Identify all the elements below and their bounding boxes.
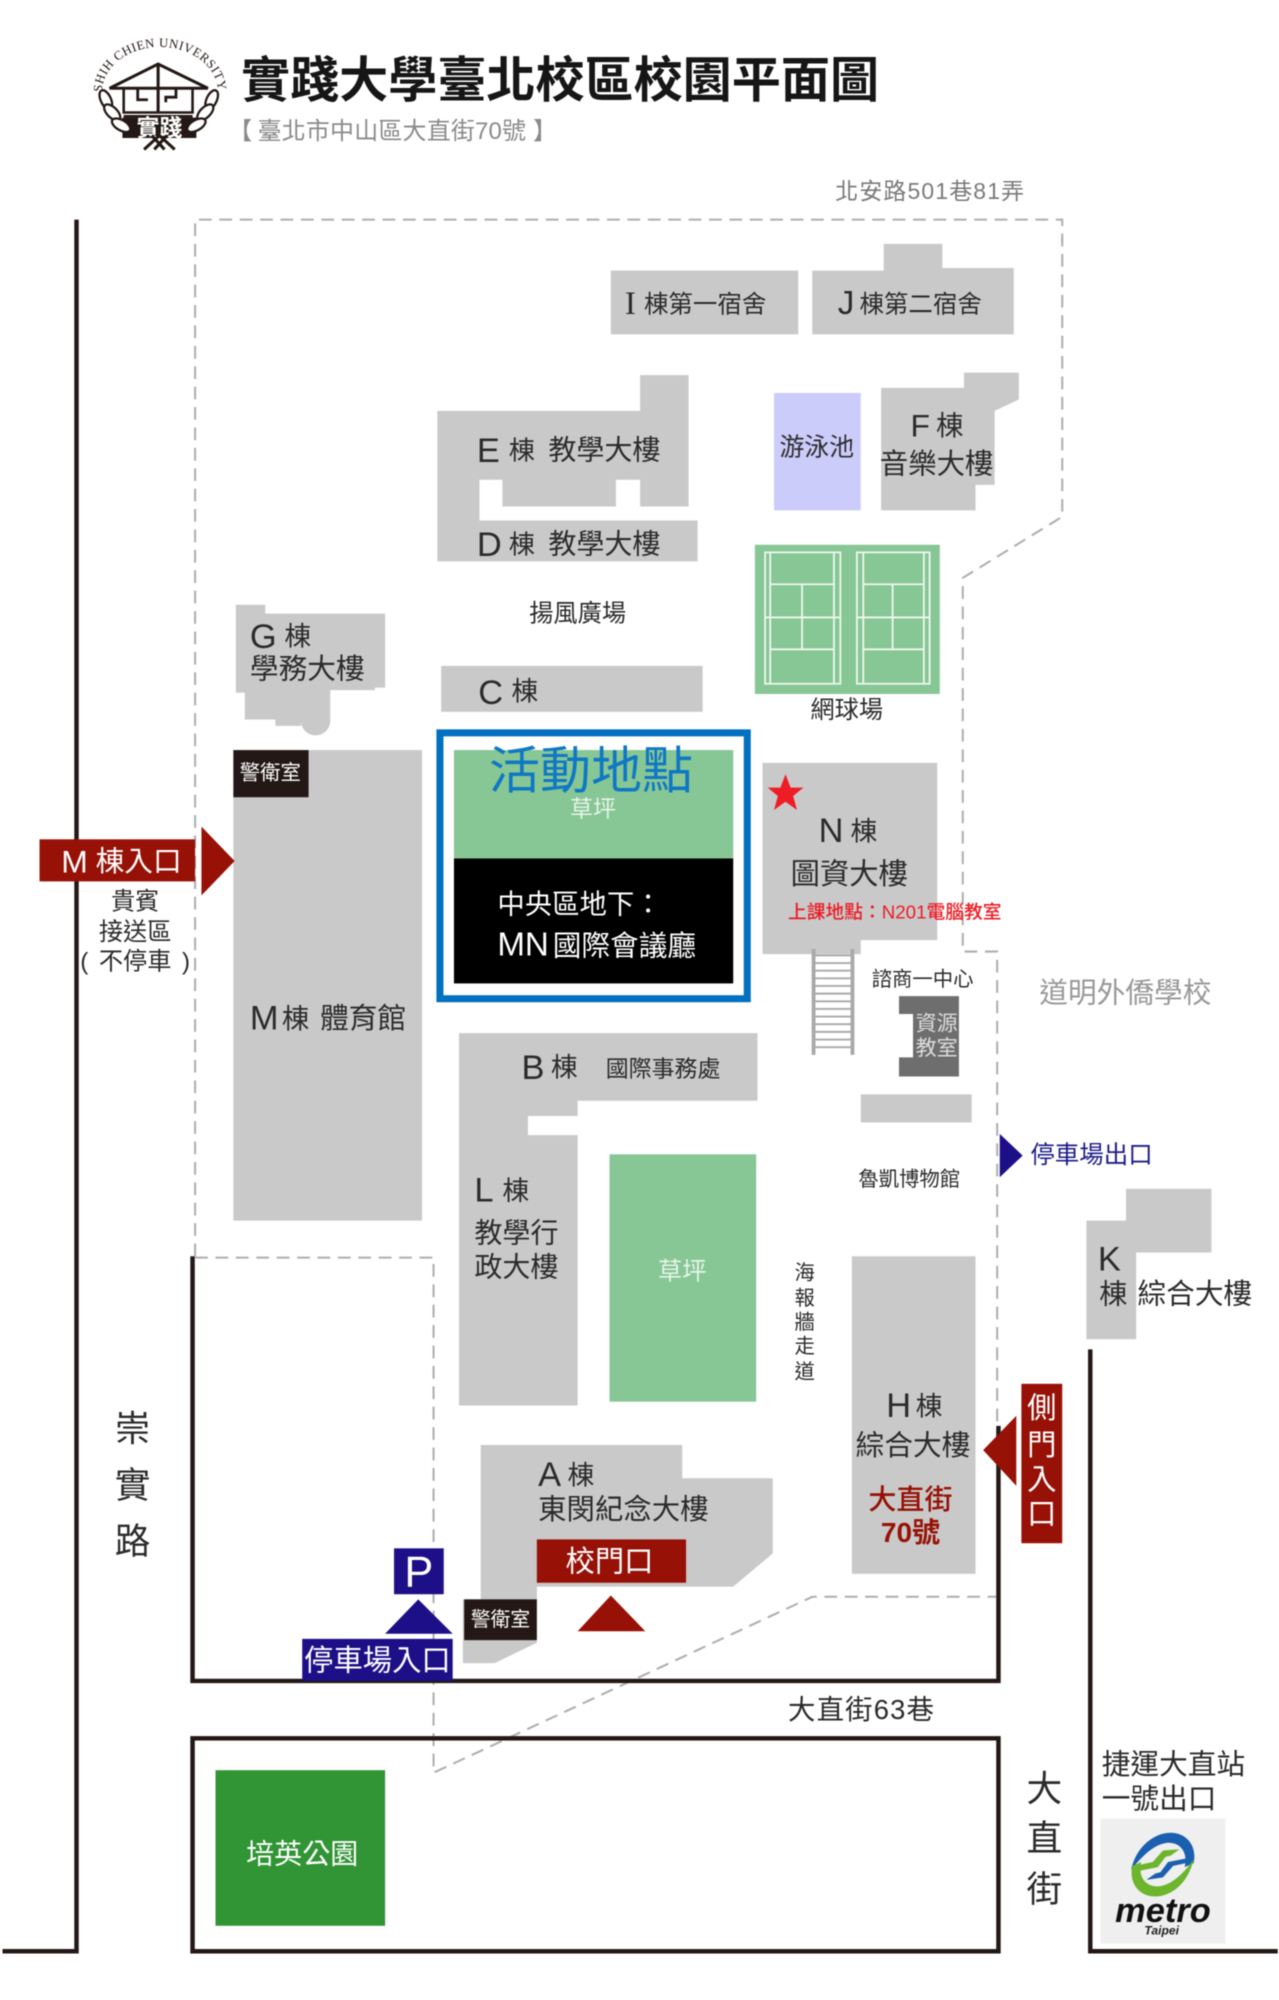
icon: Taipei metro logo: metro [1115, 1892, 1211, 1930]
building C: 棟 [511, 676, 538, 706]
building M gym [233, 750, 422, 1221]
resource classroom: 教室 [916, 1036, 958, 1060]
M entrance arrow: M [61, 843, 88, 879]
side gate entrance arrow: 入 [1027, 1464, 1056, 1497]
main gate arrow [578, 1596, 645, 1631]
road: block south of lane 63 [193, 1738, 998, 1951]
label: Dazhi Street: 直 [1027, 1819, 1062, 1859]
building J [812, 244, 1014, 334]
main gate sign [537, 1539, 686, 1583]
lower boundary dashed [195, 1258, 997, 1773]
building H: 棟 [916, 1392, 943, 1422]
park: 培英公園 [246, 1838, 358, 1869]
campus boundary dashed [195, 220, 1062, 1426]
panel: event location: MN國際會議廳 [497, 926, 696, 963]
resource classroom: 資源 [916, 1012, 958, 1036]
road: east side line [1090, 1349, 1278, 1951]
buildings E and D: 棟 [509, 435, 535, 465]
label: Dazhi Street [1027, 1769, 1062, 1910]
building F [880, 373, 1019, 510]
building I [611, 271, 798, 334]
label: VIP drop-off: 貴賓 [111, 888, 159, 915]
label: poster wall walkway [794, 1261, 815, 1384]
main gate sign: 校門口 [566, 1545, 654, 1578]
building H [852, 1256, 976, 1574]
building A: 東閔紀念大樓 [538, 1494, 709, 1526]
subtitle: address: 臺北市中山區大直街70號 [258, 118, 526, 145]
building N library [763, 763, 937, 954]
building J: 棟第二宿舍 [859, 291, 982, 319]
road: west side line [3, 220, 77, 1951]
M entrance arrow: 棟入口 [96, 846, 182, 878]
swimming pool: 游泳池 [779, 434, 854, 462]
parking P sign: P [404, 1549, 433, 1597]
building B and L: 棟 [502, 1176, 529, 1206]
icon: Taipei metro logo: Taipei [1144, 1924, 1180, 1938]
building H: H [886, 1387, 911, 1425]
building F: 音樂大樓 [880, 448, 993, 480]
label: Dazhi Street: 街 [1027, 1870, 1062, 1910]
label: Chongshi Road [115, 1409, 150, 1561]
building K: K [1098, 1240, 1121, 1278]
building B and L [459, 1033, 757, 1406]
label: poster wall walkway: 報 [794, 1287, 815, 1310]
building G [236, 605, 385, 735]
label: plaza: 揚風廣場 [529, 600, 626, 627]
parking exit arrow [1000, 1134, 1153, 1177]
building J: J [838, 285, 854, 322]
subtitle: address: 】 [533, 118, 557, 145]
subtitle: address: 【 [228, 118, 252, 145]
small building bar [861, 1094, 972, 1122]
building N library: N [819, 812, 844, 850]
icon: university logo: 實踐 [136, 114, 182, 140]
building F: 棟 [936, 410, 963, 441]
building H: 大直街 [868, 1484, 953, 1515]
panel: event location [440, 733, 747, 999]
side gate entrance arrow: 側 [1027, 1392, 1056, 1425]
building C [441, 666, 703, 712]
label: poster wall walkway: 牆 [794, 1311, 815, 1334]
side gate entrance arrow: 口 [1027, 1498, 1056, 1531]
building B and L: 教學行 [474, 1217, 559, 1248]
building G: 學務大樓 [250, 654, 365, 686]
building C: C [478, 674, 503, 712]
building K [1086, 1189, 1252, 1339]
guard room south: 警衛室 [471, 1609, 530, 1631]
building N library: 棟 [851, 817, 878, 847]
panel: event location: 活動地點 [489, 742, 693, 799]
building B and L: 棟 [551, 1053, 578, 1083]
building K: 綜合大樓 [1137, 1278, 1252, 1310]
label: poster wall walkway: 走 [794, 1335, 815, 1358]
building A [463, 1445, 773, 1663]
label: Dominican school: 道明外僑學校 [1039, 978, 1211, 1010]
label: north lane: 北安路501巷81弄 [835, 178, 1025, 204]
building H: 綜合大樓 [856, 1430, 970, 1462]
building N library: 圖資大樓 [791, 858, 908, 891]
icon: red star [768, 774, 803, 810]
label: poster wall walkway: 海 [794, 1261, 815, 1284]
buildings E and D: 棟 [509, 530, 535, 560]
buildings E and D: 教學大樓 [548, 434, 661, 465]
building B and L: 國際事務處 [606, 1056, 720, 1082]
lawn: 草坪 [658, 1258, 706, 1285]
building M gym: M [250, 999, 279, 1037]
building M gym: 棟 [282, 1003, 309, 1034]
label: poster wall walkway: 道 [794, 1361, 815, 1384]
label: class location: 上課地點：N201電腦教室 [788, 901, 1001, 922]
guard room south [464, 1599, 537, 1640]
building I: 棟第一宿舍 [644, 291, 766, 319]
guard room north: 警衛室 [240, 761, 301, 784]
panel: event location: 中央區地下： [497, 888, 662, 919]
label: Chongshi Road: 崇 [115, 1409, 150, 1449]
label: MRT exit [1102, 1749, 1245, 1815]
icon: university logo [93, 38, 228, 152]
building G: 棟 [284, 622, 311, 652]
building A: 棟 [567, 1461, 594, 1491]
icon: university logo: SHIH CHIEN UNIVERSITY [93, 38, 228, 92]
building B and L: B [522, 1049, 544, 1087]
park [216, 1770, 385, 1926]
label: MRT exit: 捷運大直站 [1102, 1749, 1245, 1781]
parking entrance arrow [385, 1599, 453, 1634]
label: VIP drop-off: 接送區 [99, 919, 172, 946]
lawn [610, 1154, 756, 1402]
tennis courts [755, 545, 940, 694]
icon: Taipei metro logo [1100, 1819, 1225, 1944]
M entrance arrow [40, 827, 235, 895]
building G: G [250, 618, 277, 656]
guard room north [233, 750, 309, 797]
parking P sign [394, 1548, 444, 1597]
buildings E and D [437, 375, 698, 564]
side gate entrance arrow: 門 [1027, 1429, 1056, 1462]
building B and L: 政大樓 [474, 1252, 559, 1283]
building M gym: 體育館 [320, 1003, 406, 1035]
label: museum: 魯凱博物館 [858, 1168, 960, 1191]
label: Dazhi Street: 大 [1027, 1769, 1062, 1809]
building K: 棟 [1099, 1278, 1127, 1309]
stairs [814, 949, 852, 1055]
building B and L: L [474, 1171, 494, 1209]
building I: I [625, 285, 636, 322]
panel: event location: 草坪 [570, 795, 616, 821]
label: MRT exit: 一號出口 [1102, 1783, 1217, 1815]
parking entrance sign: 停車場入口 [304, 1645, 451, 1678]
building A: A [538, 1456, 561, 1494]
building H: 70號 [881, 1517, 940, 1548]
label: Dazhi St lane 63: 大直街63巷 [788, 1694, 935, 1725]
label: Chongshi Road: 路 [115, 1521, 150, 1561]
title: 實踐大學臺北校區校園平面圖 [241, 54, 879, 108]
label: counseling center: 諮商一中心 [872, 968, 974, 991]
label: Chongshi Road: 實 [115, 1465, 150, 1505]
building F: F [910, 407, 930, 443]
buildings E and D: E [477, 432, 500, 470]
label: VIP drop-off [80, 888, 190, 975]
label: VIP drop-off: ( 不停車 ) [80, 948, 190, 975]
label: tennis courts: 網球場 [810, 697, 883, 724]
swimming pool [774, 393, 861, 510]
resource classroom [899, 996, 959, 1077]
road: campus south wall [193, 1256, 998, 1681]
buildings E and D: 教學大樓 [548, 529, 661, 560]
buildings E and D: D [477, 526, 502, 564]
parking exit arrow: 停車場出口 [1030, 1141, 1153, 1169]
side gate entrance arrow [983, 1384, 1062, 1543]
